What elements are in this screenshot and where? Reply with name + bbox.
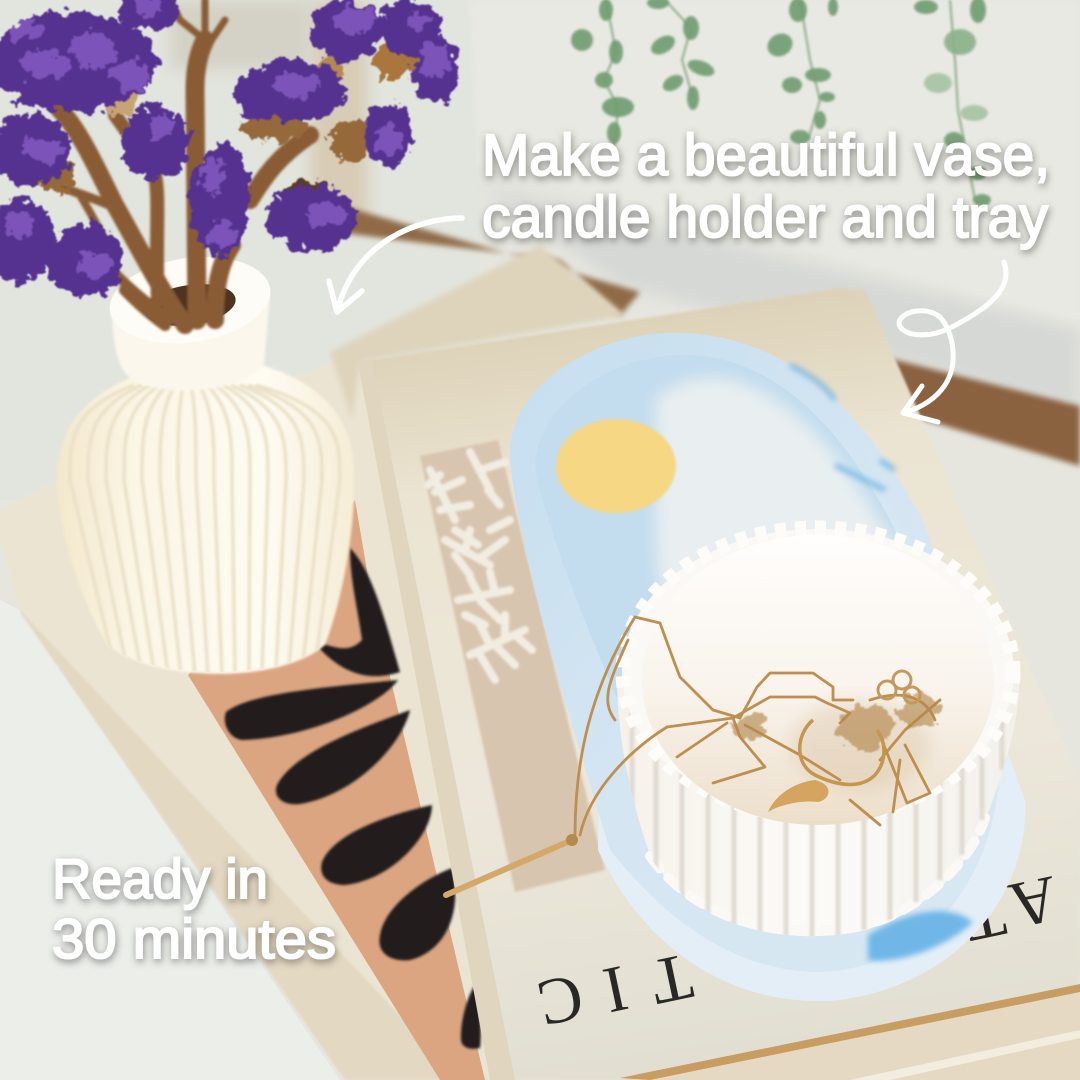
bottom book pages and gilt edge	[620, 984, 1080, 1080]
framed botanical print	[470, 0, 1080, 322]
bowl rim	[622, 529, 1014, 815]
orange panel	[188, 500, 485, 1080]
oval marble tray	[510, 333, 1025, 1001]
book title letters	[531, 861, 1064, 1040]
caption: ready in 30 minutes	[52, 847, 336, 970]
arrow: curved to vase	[329, 218, 462, 312]
stems	[40, 0, 310, 325]
bowl scalloped base	[650, 818, 985, 931]
caption: ready in 30 minutes: 30 minutes	[52, 907, 336, 970]
book title letters: A	[1002, 861, 1064, 943]
blossoms	[0, 0, 459, 296]
heading: make a beautiful vase	[482, 123, 1050, 250]
arrow: looped to tray	[899, 262, 1006, 422]
bowl ribs	[632, 700, 1002, 938]
book behind middle book	[330, 245, 626, 420]
tan strip with leaf pattern	[420, 440, 605, 892]
heading: make a beautiful vase: candle holder and tray	[482, 185, 1048, 250]
jump rings	[878, 671, 920, 703]
book title letters: T	[644, 939, 699, 1019]
gold hoop	[800, 720, 884, 784]
gold chain	[575, 617, 940, 835]
dried purple flowers	[0, 0, 459, 325]
yellow circle	[556, 419, 676, 513]
wooden frame edge	[335, 208, 1080, 466]
marble swirl	[655, 378, 905, 590]
heading: make a beautiful vase: Make a beautiful vase,	[482, 123, 1050, 188]
book title letters: C	[531, 960, 590, 1040]
tray inner basin	[535, 355, 960, 800]
black leaves	[225, 548, 481, 1049]
print vines	[604, 0, 975, 200]
seed heads	[19, 40, 417, 200]
print leaves	[571, 0, 991, 206]
book with orange leaf cover	[0, 350, 500, 1080]
vase neck	[112, 295, 270, 391]
book title letters: I	[597, 951, 634, 1027]
vase ribs	[70, 385, 340, 676]
gold half moon	[768, 780, 829, 812]
blossom highlights	[6, 0, 449, 279]
pendant bar	[446, 840, 572, 895]
ribbed cream vase	[57, 247, 354, 676]
bowl interior	[642, 535, 994, 825]
chain shadow	[790, 700, 930, 790]
ribbed white bowl	[446, 528, 1019, 938]
book title letters: T	[957, 876, 1012, 956]
vase lip	[104, 247, 276, 353]
tangled chain cluster	[732, 694, 938, 750]
lower book edge	[20, 600, 500, 1080]
caption: ready in 30 minutes: Ready in	[52, 847, 268, 910]
middle book	[358, 288, 1080, 1080]
